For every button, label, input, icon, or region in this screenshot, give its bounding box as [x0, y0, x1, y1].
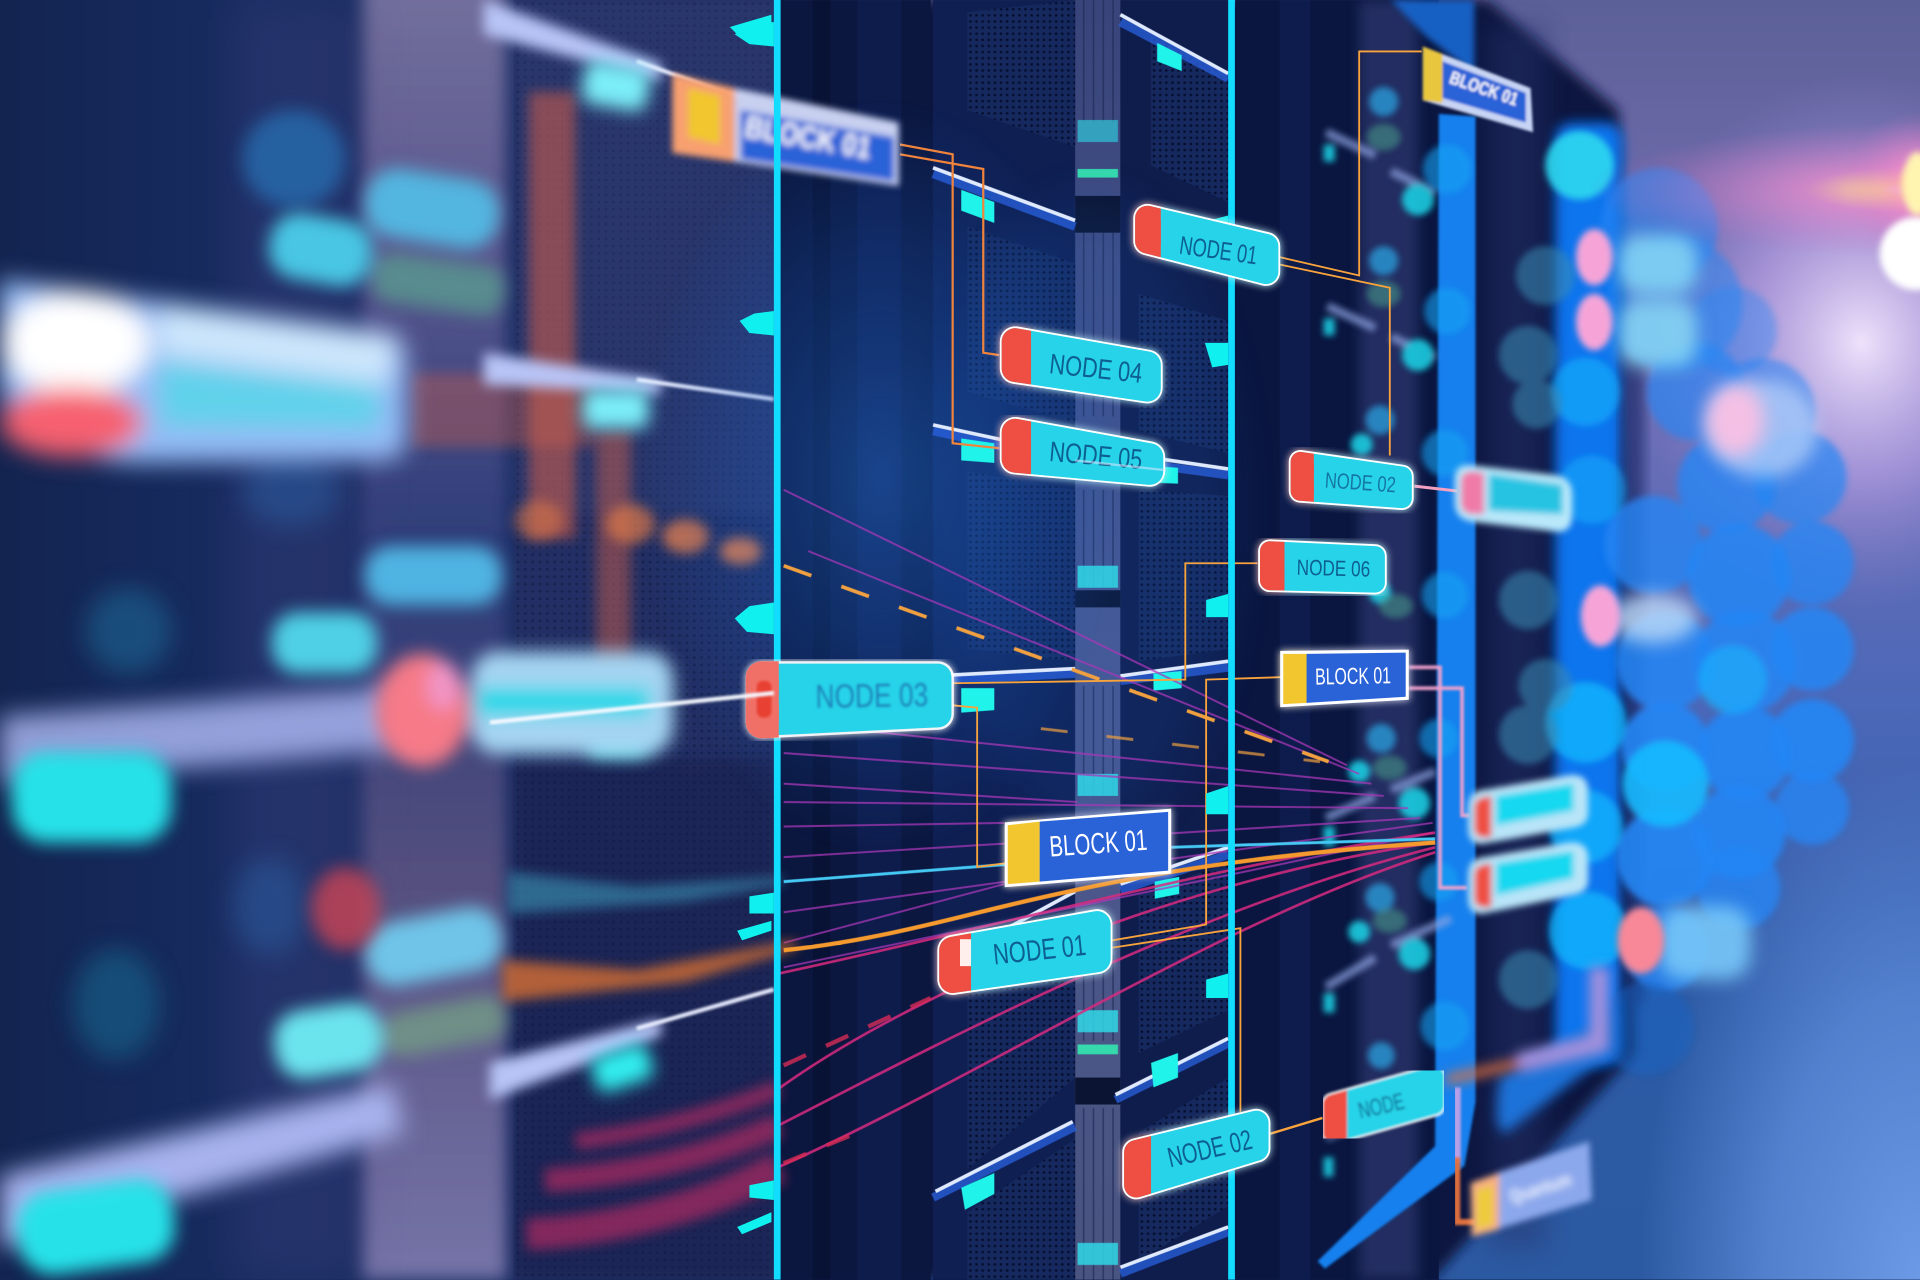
purple data lines: [784, 490, 1433, 967]
right edge glow lower: [1641, 759, 1920, 1280]
blurred pink link to node 03: [673, 691, 742, 696]
node: blurred block bottom right: Quantum: [1507, 1168, 1574, 1207]
cyan data line: [784, 839, 1435, 882]
gray drive bays: [1084, 0, 1113, 1280]
node: blurred block bottom right: [1471, 1141, 1592, 1237]
node: Node 05: [1015, 432, 1166, 475]
connector: right low node to far right: [1446, 967, 1599, 1080]
blue strip bokeh: [1419, 144, 1472, 1051]
bokeh lights: [1499, 131, 1854, 1075]
blue strip lower blur: [1497, 1016, 1610, 1133]
cyan rack indicators: [961, 43, 1182, 1210]
connector: Node 01 to top block and Node 02: [1280, 51, 1422, 456]
blurred light rays: [484, 0, 774, 1100]
blurred node: far left: [0, 279, 407, 463]
teal band blurred: [508, 872, 784, 913]
node: Block 01 center: BLOCK 01: [1048, 824, 1148, 864]
connector: Node 02 to blurred node: [1414, 486, 1457, 491]
drive LEDs: [1078, 120, 1118, 1265]
orange dashed line: [784, 566, 1329, 762]
blue glow right of frame: [943, 196, 1237, 833]
frame tabs: [730, 15, 1228, 1234]
node: Node 01 lower: NODE 01: [992, 929, 1088, 971]
dark rack mass center right: [774, 0, 1635, 1280]
node: Node 06: [1270, 551, 1375, 583]
blurred cyan and teal blobs: [12, 58, 656, 1279]
blurred node: left middle: [376, 651, 673, 767]
magenta data lines: [779, 833, 1435, 1167]
pink bokeh pills: [1576, 229, 1764, 973]
cyan panel frame: [730, 0, 1235, 1280]
node: Node 01 lower: [953, 924, 1097, 980]
blurred orange dashes: [514, 501, 762, 564]
node: Node 02 lower: NODE 02: [1165, 1124, 1255, 1173]
right rack blurred details: [1324, 87, 1451, 1177]
node: blurred right upper: [1455, 465, 1572, 532]
node: Node 02 top: [1300, 462, 1402, 498]
bright blue strip: [1318, 114, 1476, 1269]
blurred light bars far left: [0, 688, 404, 1249]
node: Node 06: NODE 06: [1296, 555, 1371, 582]
node: right lower partial: NODE: [1356, 1088, 1407, 1124]
dark column right of far strip: [1622, 355, 1644, 1004]
speaker grilles: [967, 0, 1228, 1280]
node: Block 01 top left: [672, 73, 899, 186]
node: Block 01 right: BLOCK 01: [1315, 662, 1391, 690]
connector: Node 06 to Node 03: [953, 563, 1258, 683]
magenta bands blurred: [527, 1089, 779, 1234]
magenta dash fragments: [784, 998, 931, 1163]
orange data stream: [784, 842, 1435, 950]
node: Node 03: NODE 03: [815, 677, 928, 716]
node: Node 04: [1015, 342, 1147, 389]
node: Node 05: NODE 05: [1048, 436, 1144, 475]
server rack columns: [779, 0, 1547, 1280]
blurred red blob: [311, 867, 380, 950]
node: blurred right lower: [1468, 842, 1588, 914]
connector: Node 03 to center block: [953, 705, 1005, 867]
node: Block 01 center: [1007, 811, 1169, 885]
connector: lower Node 01 to right block and Node 02: [1112, 677, 1281, 1112]
connector: lower Node 02 to right node: [1270, 1118, 1322, 1134]
orange band blurred: [502, 940, 796, 1002]
node: blurred right middle: [1468, 775, 1588, 844]
connector: bottom right block: [1457, 1087, 1476, 1222]
pale bokeh highlights: [1609, 235, 1818, 980]
node: Node 01 top: NODE 01: [1178, 232, 1259, 270]
connector: Block 01 top to nodes 04 and 05: [900, 144, 999, 448]
node: Node 02 lower: [1136, 1123, 1256, 1185]
blurred orange bands: [410, 92, 631, 722]
node: Block 01 top left: BLOCK 01: [742, 108, 874, 166]
node: Node 04: NODE 04: [1048, 348, 1144, 389]
node: Node 03: [490, 677, 938, 722]
node: right lower partial: [1333, 1076, 1434, 1133]
lens flare: [1589, 110, 1920, 290]
node: Node 02 top: NODE 02: [1324, 468, 1397, 497]
glass panel glow: [637, 98, 1127, 857]
blurred left background: [0, 0, 776, 1280]
far right blue strip: [1555, 122, 1622, 1065]
node: Node 01 top: [1147, 218, 1266, 272]
connector: right block to blurred nodes: [1408, 667, 1469, 888]
lavender glow upper right: [1629, 73, 1920, 612]
rack light bars: [933, 15, 1228, 1273]
node: Block 01 top right: [1423, 47, 1533, 132]
node: Block 01 top right: BLOCK 01: [1447, 67, 1521, 110]
node: Block 01 right: [1282, 651, 1407, 705]
blue strip top: [1391, 0, 1474, 73]
